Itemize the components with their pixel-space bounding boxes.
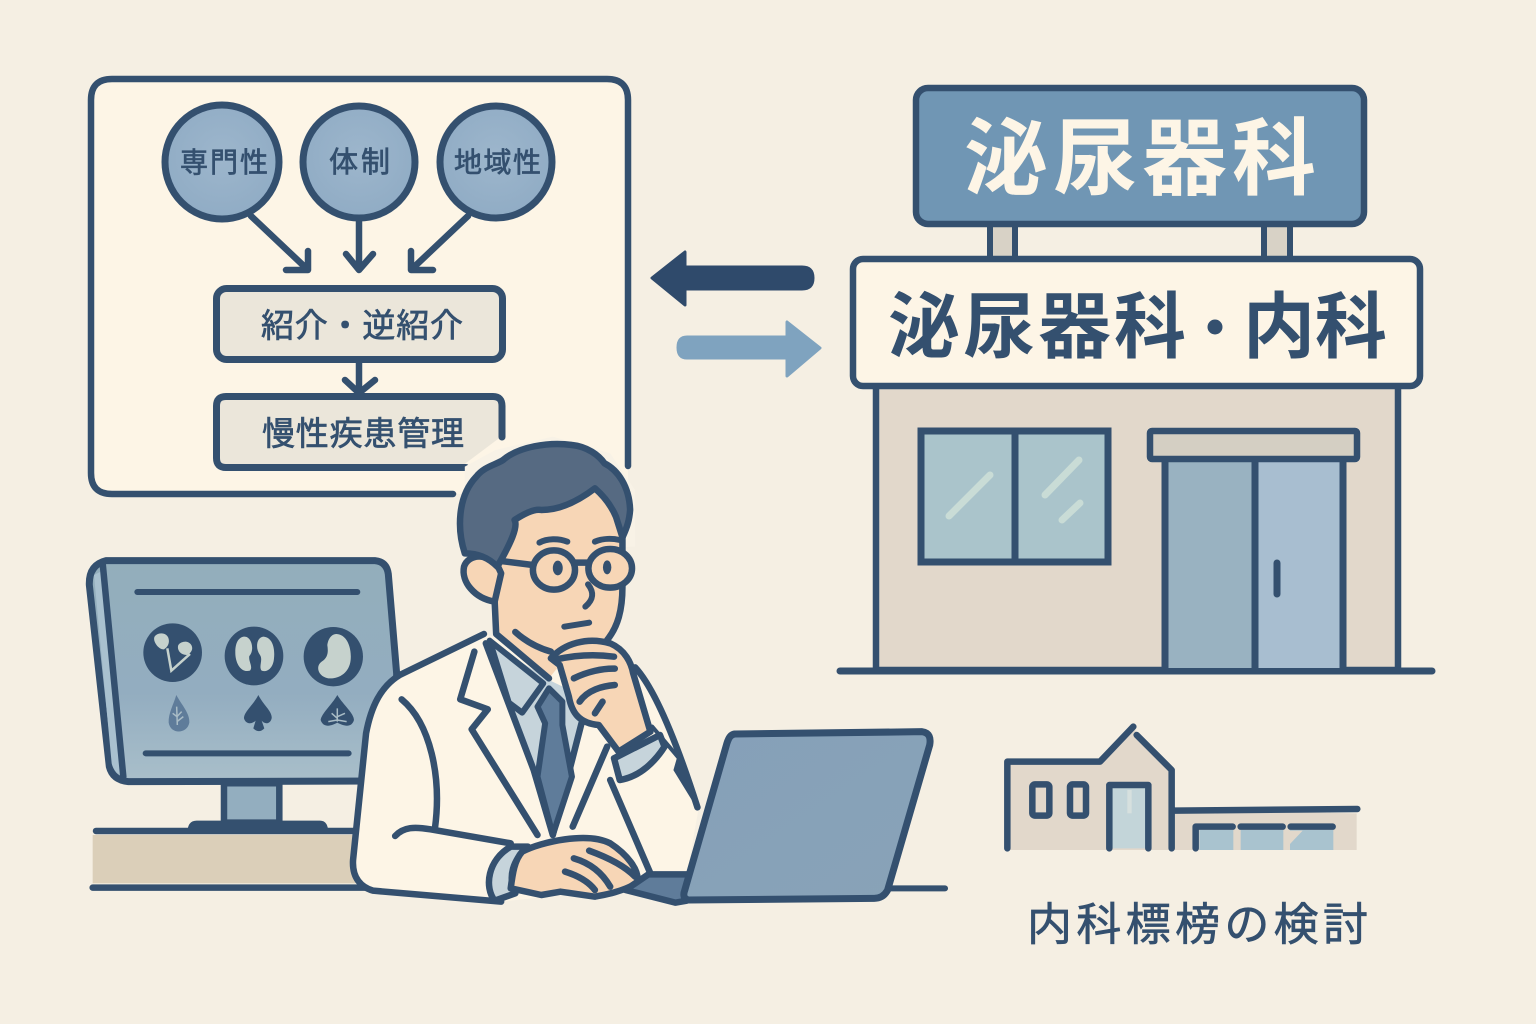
- ear: [464, 556, 501, 602]
- doctor and laptop: [353, 437, 945, 903]
- laptop base: [626, 874, 691, 903]
- lab coat lapels: [402, 643, 650, 873]
- box: referral: 紹介・逆紹介: [261, 307, 463, 344]
- monitor screen: [89, 561, 397, 782]
- lower hand and cuff: [489, 838, 638, 901]
- icon: spade drop: [244, 695, 272, 731]
- box: referral: [216, 288, 502, 360]
- circle: system: 体制: [329, 146, 390, 179]
- sign: urology: 泌尿器科: [964, 112, 1316, 206]
- arrow: system to referral: [346, 220, 373, 270]
- arrow: clinic to panel: [652, 252, 813, 305]
- arrow: panel to clinic: [678, 322, 820, 376]
- halo behind hair: [465, 437, 635, 553]
- circle: specialty: [165, 105, 279, 219]
- circle: regional: [440, 106, 552, 218]
- arrow: specialty to referral: [251, 216, 308, 270]
- sign: urology and internal medicine: 泌尿器科: [888, 288, 1186, 368]
- sign: urology: [916, 88, 1364, 224]
- box: chronic disease management: 慢性疾患管理: [262, 415, 464, 452]
- lab coat: [353, 634, 699, 902]
- shirt: [489, 641, 583, 833]
- circle: regional: 地域性: [454, 147, 541, 178]
- face details: [539, 539, 620, 627]
- entrance door: [1150, 431, 1357, 670]
- box: chronic disease management: [216, 396, 502, 468]
- sign: urology and internal medicine: 内科: [1243, 288, 1387, 368]
- table line right: [882, 885, 945, 891]
- building wall: [876, 380, 1398, 670]
- collar: [490, 641, 543, 713]
- clinic building: [840, 88, 1432, 671]
- left arm sleeve: [395, 828, 511, 843]
- small clinic icon: [1007, 727, 1357, 850]
- circle: specialty: 専門性: [180, 147, 268, 178]
- icon: kidney: [304, 627, 363, 686]
- arrow: referral to chronic care: [345, 362, 375, 393]
- sign: urology and internal medicine: [853, 259, 1420, 386]
- hair: [460, 444, 630, 567]
- icon: leaf drop: [169, 695, 189, 732]
- icon: kidneys: [225, 627, 283, 685]
- monitor and desk: [89, 561, 397, 888]
- ground line: [840, 668, 1432, 674]
- neck and face: [495, 488, 622, 678]
- window: [921, 431, 1108, 562]
- laptop: [684, 732, 930, 900]
- panel: referral factors: [91, 79, 628, 494]
- arrow: regional to referral: [411, 216, 468, 270]
- circle: system: [303, 106, 415, 218]
- sign posts: [990, 224, 1290, 260]
- right sleeve edge: [635, 667, 697, 807]
- caption: 内科標榜の検討: [1027, 899, 1368, 950]
- monitor stand: [187, 783, 328, 833]
- thinking hand: [551, 641, 650, 752]
- glasses: [501, 549, 632, 590]
- raised cuff: [614, 735, 665, 780]
- tie: [537, 688, 572, 835]
- icon: tree drop: [321, 695, 354, 726]
- icon: bladder: [143, 623, 202, 682]
- desk: [93, 831, 370, 888]
